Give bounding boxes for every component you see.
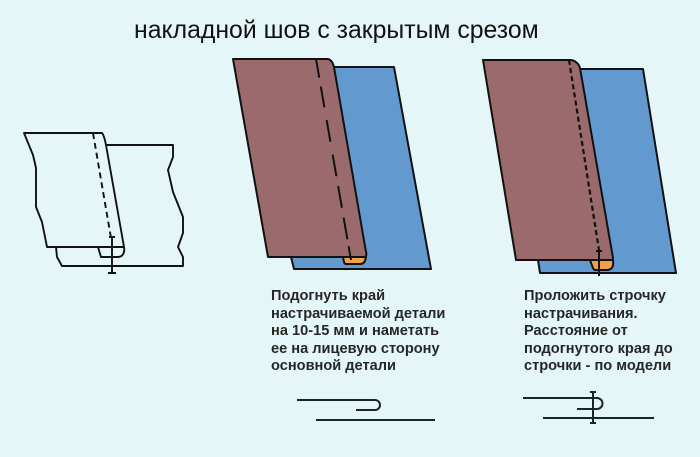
text: step two bbox=[524, 288, 673, 374]
text: step two: Проложить строчку bbox=[524, 288, 666, 304]
diagram: fold cross-section bbox=[297, 400, 435, 420]
diagram: basted fold, coloured bbox=[233, 59, 431, 269]
text: step one bbox=[271, 288, 445, 374]
text: step two: настрачивания. bbox=[524, 306, 638, 322]
text: step one: основной детали bbox=[271, 358, 396, 374]
diagram: topstitched fold, coloured bbox=[483, 60, 676, 276]
title: накладной шов с закрытым срезом bbox=[134, 17, 539, 44]
text: step one: Подогнуть край bbox=[271, 288, 385, 304]
text: step two: строчки - по модели bbox=[524, 358, 671, 374]
text: step one: ее на лицевую сторону bbox=[271, 340, 440, 356]
diagram: stitched cross-section bbox=[523, 392, 654, 423]
text: step two: подогнутого края до bbox=[524, 340, 673, 356]
text: step two: Расстояние от bbox=[524, 323, 628, 339]
diagram: outline seam sketch bbox=[24, 133, 183, 273]
text: step one: на 10-15 мм и наметать bbox=[271, 323, 439, 339]
text: step one: настрачиваемой детали bbox=[271, 306, 445, 322]
